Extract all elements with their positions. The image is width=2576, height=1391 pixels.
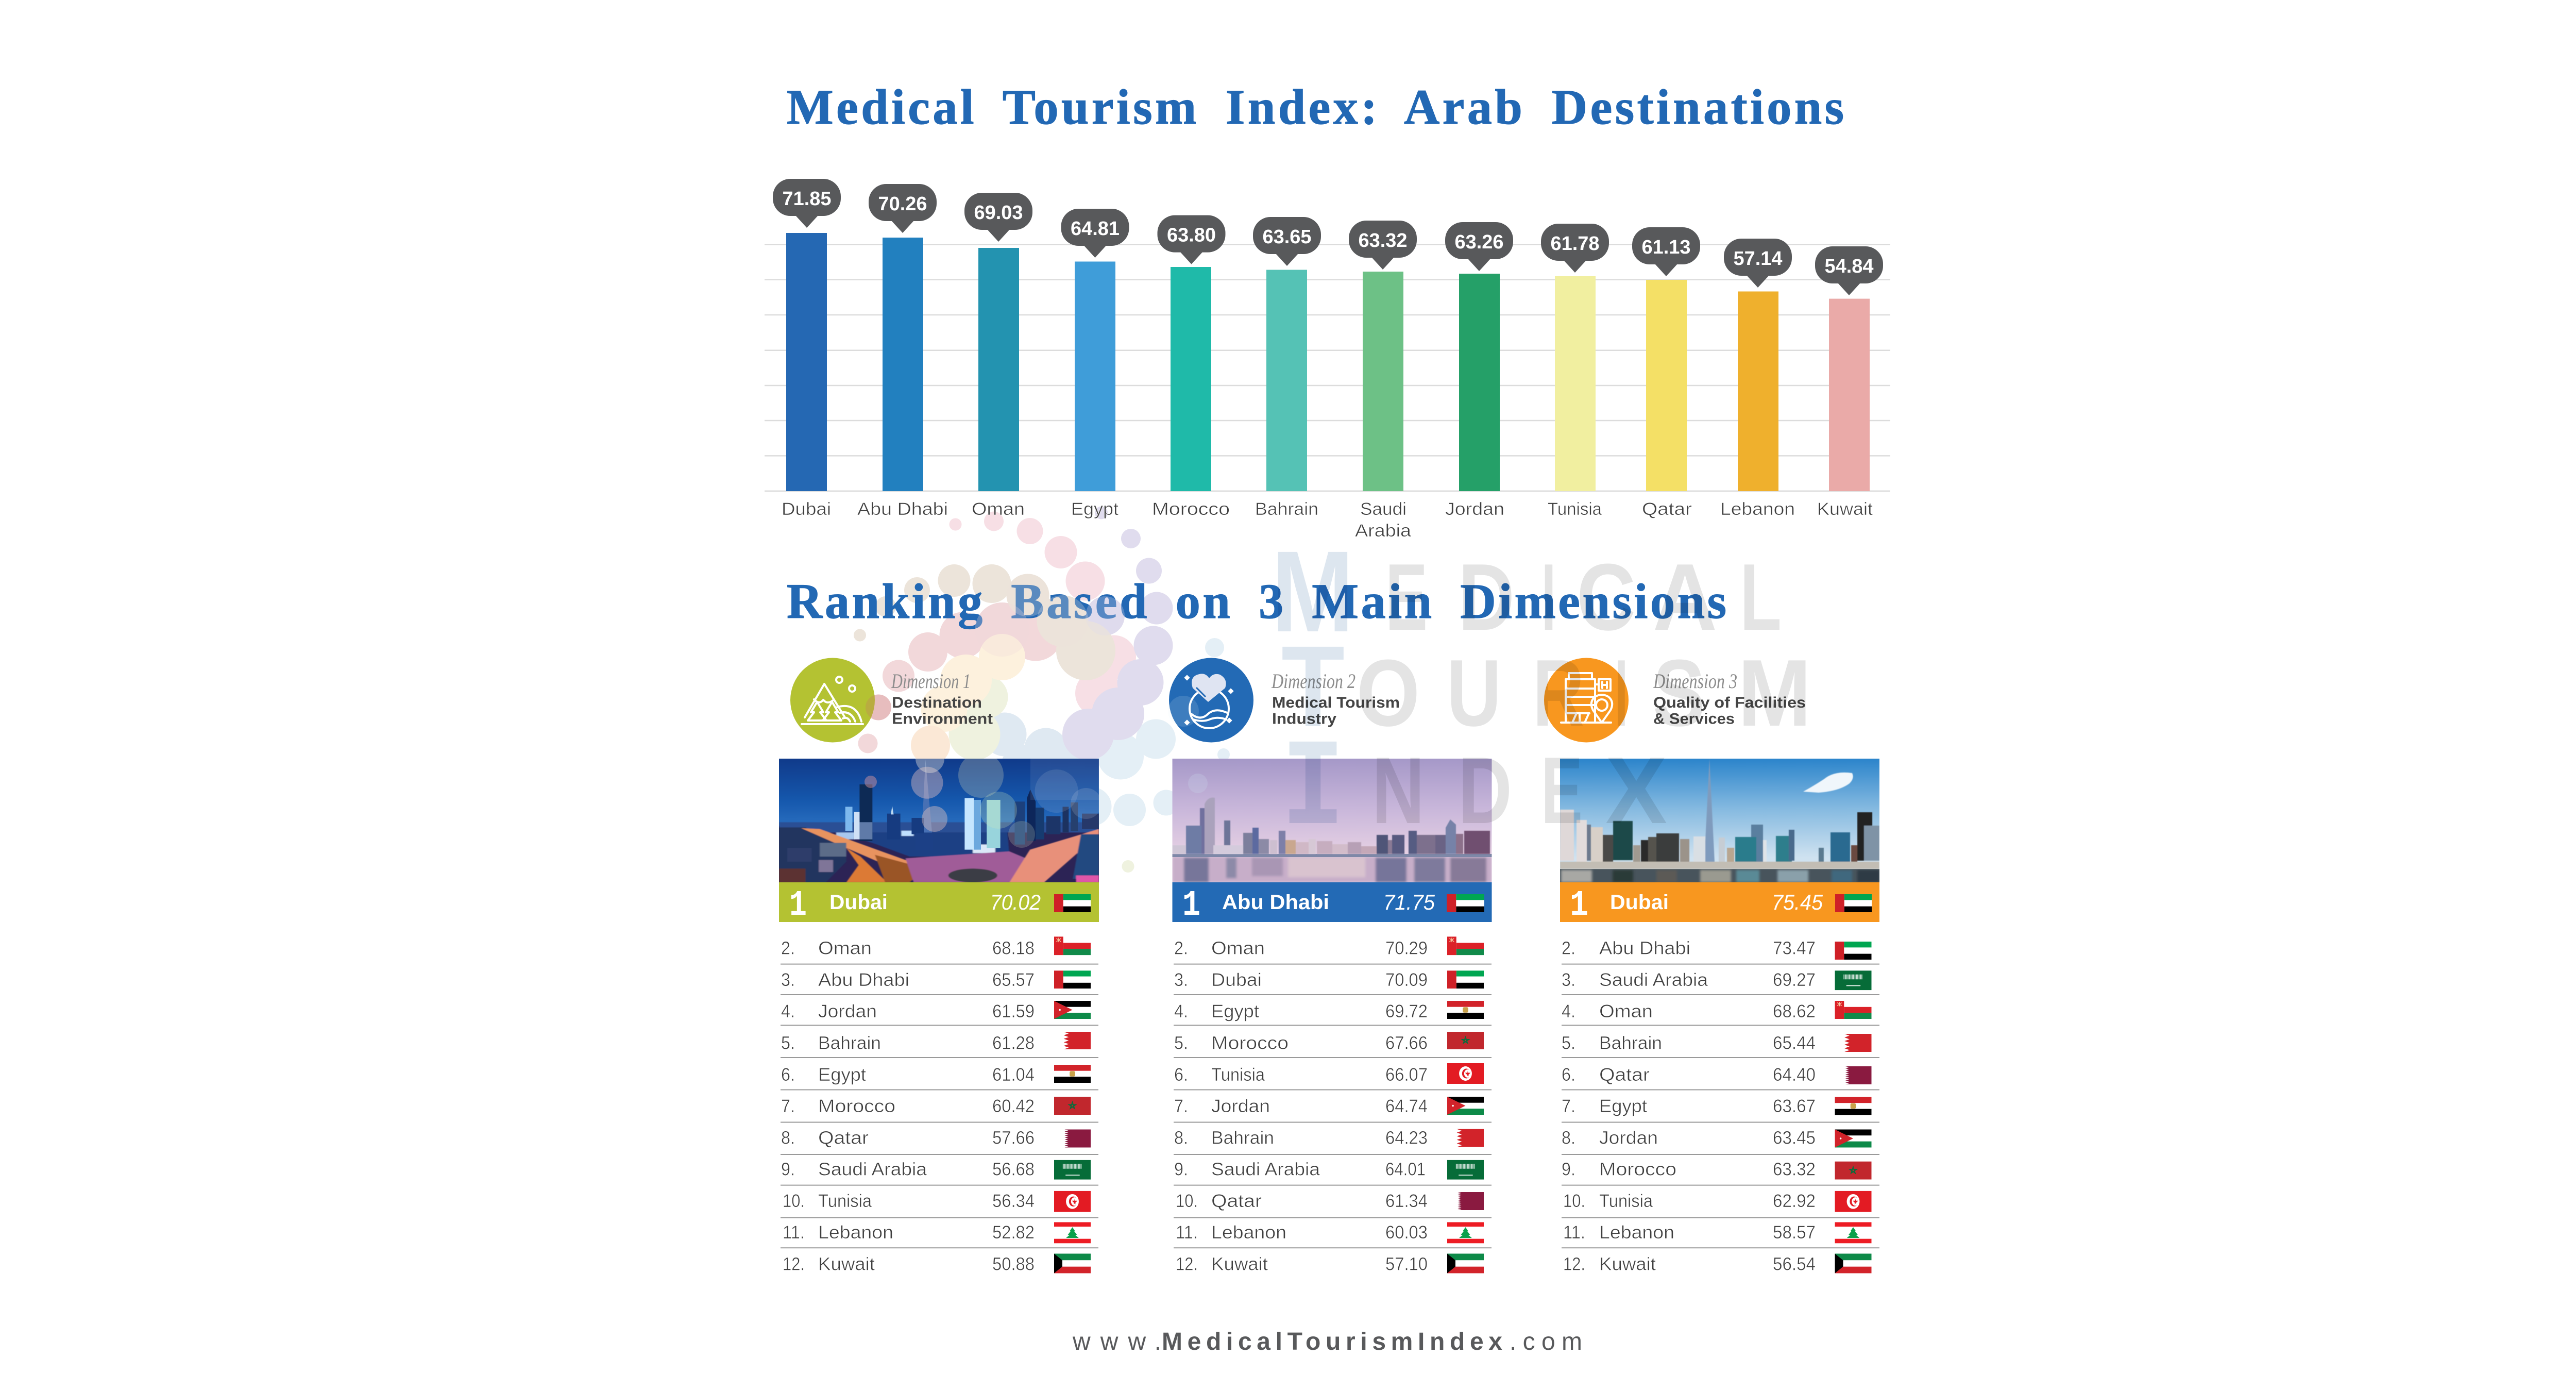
dimension 1 label: Destination — [892, 694, 982, 711]
category labels: Oman — [972, 499, 1025, 519]
row: Bahrain: 5. — [1562, 1033, 1575, 1053]
row: Oman: 2. — [1174, 938, 1188, 959]
category labels: Qatar — [1642, 499, 1692, 519]
row: Saudi Arabia: 3. — [1562, 970, 1575, 990]
watermark: MEDICAL TOURISM INDEX: M — [1738, 640, 1811, 746]
row: Morocco: 5. — [1174, 1033, 1188, 1053]
row: Kuwait: 12. — [1176, 1254, 1198, 1274]
dimension 3 label — [1653, 669, 1806, 728]
photo: Dubai daytime skyline — [1560, 759, 1879, 882]
row: Tunisia: 62.92 — [1773, 1191, 1816, 1211]
row: Bahrain: 8. — [1174, 1128, 1188, 1148]
watermark: MEDICAL TOURISM INDEX: U — [1447, 640, 1501, 746]
row: Lebanon: 11. — [783, 1222, 805, 1243]
watermark: MEDICAL TOURISM INDEX: R — [1533, 640, 1584, 746]
row: Jordan — [1562, 1128, 1871, 1148]
icon: heart over globe — [1168, 658, 1253, 742]
rank 1 band: Dubai 70.02: 70.02 — [990, 890, 1041, 914]
rank 1 band: Dubai 75.45: 75.45 — [1772, 890, 1823, 914]
row: Dubai — [1174, 970, 1484, 990]
row: Abu Dhabi: 2. — [1562, 938, 1575, 959]
row: Bahrain: Bahrain — [1211, 1128, 1274, 1148]
row: Qatar: Qatar — [1211, 1191, 1262, 1211]
row: Qatar: 64.40 — [1773, 1065, 1816, 1085]
row: Lebanon — [1563, 1222, 1871, 1243]
value callouts: 69.03 — [974, 202, 1023, 224]
row: Tunisia — [1174, 1063, 1484, 1085]
row: Lebanon: 60.03 — [1385, 1222, 1428, 1243]
row: Bahrain — [781, 1032, 1091, 1053]
watermark: MEDICAL TOURISM INDEX: T — [1281, 622, 1345, 751]
row: Tunisia: 10. — [783, 1191, 805, 1211]
row: Jordan — [781, 1001, 1091, 1021]
row: Jordan: Jordan — [1599, 1128, 1658, 1148]
row: Morocco: 9. — [1562, 1160, 1575, 1180]
row: Bahrain: 65.44 — [1773, 1033, 1816, 1053]
dimension 3 label: & Services — [1653, 710, 1735, 728]
row: Egypt: 7. — [1562, 1096, 1575, 1116]
bars — [786, 233, 1870, 491]
row: Oman: Oman — [1211, 938, 1265, 959]
watermark: MEDICAL TOURISM INDEX — [1272, 527, 1811, 861]
row: Qatar: 6. — [1562, 1065, 1575, 1085]
photo: Dubai at night — [779, 759, 1099, 882]
dimension 2 label: Medical Tourism — [1272, 694, 1400, 711]
row: Bahrain: Bahrain — [818, 1033, 881, 1053]
row: Abu Dhabi: Abu Dhabi — [818, 970, 909, 990]
row: Egypt — [1174, 1001, 1484, 1021]
row: Saudi Arabia: Saudi Arabia — [1211, 1160, 1320, 1180]
footer: website address: MedicalTourismIndex — [1162, 1328, 1502, 1355]
dimension 3 label: Dimension 3 — [1653, 669, 1737, 693]
row: Qatar: Qatar — [1599, 1065, 1650, 1085]
row: Jordan: 4. — [781, 1001, 795, 1021]
watermark: MEDICAL TOURISM INDEX: N — [1372, 737, 1425, 843]
category labels: Lebanon — [1720, 499, 1795, 519]
watermark: MEDICAL TOURISM INDEX: I — [1615, 640, 1628, 746]
row: Dubai: 3. — [1174, 970, 1188, 990]
row: Oman: 68.18 — [992, 938, 1035, 959]
row: Kuwait: 56.54 — [1773, 1254, 1816, 1274]
panel: dimension 1 header — [790, 658, 993, 742]
translucent bubbles over night photo — [865, 759, 1099, 848]
rank 1 band: Dubai 75.45: 1 — [1570, 885, 1588, 926]
row: Jordan: 7. — [1174, 1096, 1188, 1116]
row: Lebanon: 11. — [1563, 1222, 1585, 1243]
value callouts: 54.84 — [1825, 256, 1873, 277]
watermark: MEDICAL TOURISM INDEX: A — [1653, 544, 1717, 650]
row: Jordan: Jordan — [818, 1001, 877, 1021]
row: Abu Dhabi: 65.57 — [992, 970, 1035, 990]
row: Tunisia: 6. — [1174, 1065, 1188, 1085]
row: Qatar: 61.34 — [1385, 1191, 1428, 1211]
category labels: Morocco — [1152, 499, 1230, 519]
row: Oman: Oman — [818, 938, 872, 959]
value callouts: 61.13 — [1641, 237, 1691, 258]
category labels: Tunisia — [1548, 499, 1602, 519]
category labels — [782, 499, 1873, 541]
heading: Ranking Based on 3 Main Dimensions: Ranking Based on 3 Main Dimensions — [787, 574, 1726, 629]
row: Kuwait — [1176, 1253, 1484, 1274]
row: Egypt: 69.72 — [1385, 1001, 1428, 1021]
row: Saudi Arabia — [781, 1160, 1091, 1180]
category labels: Dubai — [782, 499, 831, 519]
row: Qatar — [781, 1128, 1091, 1148]
row: Qatar — [1562, 1065, 1871, 1085]
icon: mountain and trees — [790, 658, 891, 742]
icon: hospital building and pin — [1544, 658, 1629, 742]
rank 1 band: Dubai 70.02: 1 — [789, 885, 807, 926]
row: Morocco: Morocco — [1211, 1033, 1289, 1053]
list: dimension 3 rankings — [1562, 938, 1879, 1274]
watermark: MEDICAL TOURISM INDEX: E — [1541, 737, 1583, 843]
row: Tunisia: Tunisia — [1599, 1191, 1653, 1211]
footer: website address — [1072, 1328, 1582, 1355]
row: Saudi Arabia: 9. — [781, 1160, 795, 1180]
row: Tunisia: Tunisia — [1211, 1065, 1265, 1085]
row: Bahrain: Bahrain — [1599, 1033, 1662, 1053]
row: Abu Dhabi — [781, 970, 1091, 990]
row: Egypt: 6. — [781, 1065, 795, 1085]
row: Qatar: 8. — [781, 1128, 795, 1148]
row: Abu Dhabi: 73.47 — [1773, 938, 1816, 959]
row: Lebanon: Lebanon — [1599, 1222, 1674, 1243]
row: Kuwait: 12. — [1563, 1254, 1585, 1274]
footer: website address: www. — [1072, 1328, 1161, 1355]
watermark: MEDICAL TOURISM INDEX: E — [1385, 544, 1428, 650]
dimension 2 label: Dimension 2 — [1271, 669, 1355, 693]
row: Kuwait: 50.88 — [992, 1254, 1035, 1274]
row: Egypt: 61.04 — [992, 1065, 1035, 1085]
row: Jordan: Jordan — [1211, 1096, 1270, 1116]
photo: Abu Dhabi skyline — [1173, 759, 1492, 882]
row: Egypt: Egypt — [818, 1065, 866, 1085]
value callouts — [773, 179, 1883, 295]
row: Oman: Oman — [1599, 1001, 1653, 1021]
value callouts: 61.78 — [1551, 233, 1599, 255]
watermark: MEDICAL TOURISM INDEX: D — [1458, 737, 1512, 843]
row: Kuwait: Kuwait — [1599, 1254, 1656, 1274]
row: Saudi Arabia: 56.68 — [992, 1160, 1035, 1180]
row: Lebanon: Lebanon — [818, 1222, 893, 1243]
watermark: MEDICAL TOURISM INDEX: I — [1281, 720, 1345, 861]
row: Kuwait: Kuwait — [818, 1254, 875, 1274]
row: Qatar — [1176, 1191, 1484, 1211]
rank 1 band: Dubai 70.02 — [779, 882, 1099, 926]
bar chart: overall index by destination — [765, 179, 1890, 541]
row: Oman — [1562, 1001, 1871, 1021]
rank 1 band: Dubai 75.45 — [1560, 882, 1879, 926]
row: Egypt: Egypt — [1211, 1001, 1259, 1021]
value callouts: 63.80 — [1167, 225, 1216, 246]
row: Kuwait: Kuwait — [1211, 1254, 1268, 1274]
watermark: MEDICAL TOURISM INDEX: M — [1272, 527, 1354, 656]
row: Dubai: Dubai — [1211, 970, 1262, 990]
row: Bahrain: 64.23 — [1385, 1128, 1428, 1148]
row: Morocco: 7. — [781, 1096, 795, 1116]
row: Oman: 68.62 — [1773, 1001, 1816, 1021]
row: Kuwait — [1563, 1253, 1871, 1274]
row: Oman — [781, 936, 1091, 959]
rank 1 band: Abu Dhabi 71.75: Abu Dhabi — [1222, 891, 1329, 914]
row: Qatar: 10. — [1176, 1191, 1198, 1211]
rank 1 band: Abu Dhabi 71.75: 1 — [1182, 885, 1200, 926]
row: Oman — [1174, 936, 1484, 959]
row: Lebanon — [1176, 1222, 1484, 1243]
row: Morocco — [781, 1096, 1091, 1116]
watermark: MEDICAL TOURISM INDEX: O — [1357, 640, 1420, 746]
bubble tint over heading — [975, 574, 1125, 657]
row: Kuwait: 57.10 — [1385, 1254, 1428, 1274]
watermark: MEDICAL TOURISM INDEX: I — [1541, 544, 1556, 650]
dimension 1 label — [891, 669, 993, 728]
row: Bahrain: 61.28 — [992, 1033, 1035, 1053]
dimension 3 label: Quality of Facilities — [1653, 694, 1806, 711]
footer: website address: .com — [1510, 1328, 1582, 1355]
value callouts: 57.14 — [1733, 248, 1783, 270]
row: Tunisia — [783, 1191, 1091, 1212]
row: Tunisia: 66.07 — [1385, 1065, 1428, 1085]
category labels: Abu Dhabi — [857, 499, 948, 519]
row: Morocco: Morocco — [1599, 1160, 1676, 1180]
dimension 2 label — [1271, 669, 1400, 728]
row: Saudi Arabia — [1174, 1160, 1484, 1180]
category labels: Jordan — [1445, 499, 1504, 519]
row: Tunisia: Tunisia — [818, 1191, 872, 1211]
row: Saudi Arabia — [1562, 970, 1871, 990]
rank 1 band: Dubai 70.02: Dubai — [829, 891, 888, 914]
watermark: MEDICAL TOURISM INDEX: D — [1458, 544, 1515, 650]
watermark: MEDICAL TOURISM INDEX: X — [1605, 737, 1667, 843]
row: Lebanon: Lebanon — [1211, 1222, 1286, 1243]
row: Kuwait: 12. — [783, 1254, 805, 1274]
row: Qatar: 57.66 — [992, 1128, 1035, 1148]
category labels: Egypt — [1071, 499, 1119, 519]
title: Medical Tourism Index: Arab Destinations: Medical Tourism Index: Arab Destinations — [787, 79, 1844, 135]
row: Abu Dhabi — [1562, 938, 1871, 960]
watermark: MEDICAL TOURISM INDEX: C — [1577, 544, 1636, 650]
value callouts: 63.26 — [1455, 231, 1503, 253]
row: Egypt — [781, 1065, 1091, 1085]
panel: dimension 3 header — [1544, 658, 1806, 742]
category labels: Bahrain — [1255, 499, 1318, 519]
panel: dimension 2 header — [1168, 658, 1400, 742]
row: Egypt: 4. — [1174, 1001, 1188, 1021]
row: Morocco: 67.66 — [1385, 1033, 1428, 1053]
row: Saudi Arabia: 9. — [1174, 1160, 1188, 1180]
row: Dubai: 70.09 — [1385, 970, 1428, 990]
row: Jordan: 64.74 — [1385, 1096, 1428, 1116]
value callouts: 71.85 — [782, 188, 832, 210]
rank 1 band: Abu Dhabi 71.75 — [1173, 882, 1492, 926]
row: Morocco: Morocco — [818, 1096, 895, 1116]
row: Oman: 70.29 — [1385, 938, 1428, 959]
row: Oman: 2. — [781, 938, 795, 959]
value callouts: 63.65 — [1262, 226, 1312, 248]
row: Bahrain — [1174, 1128, 1484, 1148]
value callouts: 63.32 — [1358, 230, 1408, 252]
row: Morocco: 63.32 — [1773, 1160, 1816, 1180]
row: Morocco — [1562, 1160, 1871, 1180]
row: Qatar: Qatar — [818, 1128, 869, 1148]
row: Saudi Arabia: Saudi Arabia — [818, 1160, 927, 1180]
row: Abu Dhabi: Abu Dhabi — [1599, 938, 1690, 959]
category labels: Saudi — [1360, 499, 1406, 519]
watermark: MEDICAL TOURISM INDEX: L — [1740, 544, 1782, 650]
dimension 1 label: Environment — [892, 710, 993, 728]
rank 1 band: Dubai 75.45: Dubai — [1610, 891, 1669, 914]
dimension 2 label: Industry — [1272, 710, 1336, 728]
row: Kuwait — [783, 1253, 1091, 1274]
decorative bubble cluster — [854, 506, 1230, 873]
row: Abu Dhabi: 3. — [781, 970, 795, 990]
value callouts: 70.26 — [878, 193, 927, 215]
category labels: Kuwait — [1817, 499, 1873, 519]
row: Egypt: 63.67 — [1773, 1096, 1816, 1116]
row: Morocco — [1174, 1032, 1484, 1053]
category labels: Arabia — [1355, 521, 1411, 541]
row: Jordan: 63.45 — [1773, 1128, 1816, 1148]
row: Jordan: 61.59 — [992, 1001, 1035, 1021]
row: Saudi Arabia: Saudi Arabia — [1599, 970, 1708, 990]
value callouts: 64.81 — [1071, 218, 1120, 240]
row: Saudi Arabia: 69.27 — [1773, 970, 1816, 990]
row: Bahrain — [1562, 1033, 1871, 1053]
list: dimension 1 rankings — [781, 936, 1098, 1274]
row: Tunisia — [1563, 1191, 1871, 1212]
row: Egypt: Egypt — [1599, 1096, 1647, 1116]
row: Lebanon: 58.57 — [1773, 1222, 1816, 1243]
row: Tunisia: 56.34 — [992, 1191, 1035, 1211]
watermark: MEDICAL TOURISM INDEX: S — [1653, 640, 1705, 746]
row: Oman: 4. — [1562, 1001, 1575, 1021]
list: dimension 2 rankings — [1174, 936, 1492, 1274]
row: Lebanon: 52.82 — [992, 1222, 1035, 1243]
row: Egypt — [1562, 1096, 1871, 1116]
dimension 1 label: Dimension 1 — [891, 669, 971, 693]
row: Morocco: 60.42 — [992, 1096, 1035, 1116]
row: Lebanon: 11. — [1176, 1222, 1198, 1243]
row: Jordan: 8. — [1562, 1128, 1575, 1148]
row: Tunisia: 10. — [1563, 1191, 1585, 1211]
row: Bahrain: 5. — [781, 1033, 795, 1053]
rank 1 band: Abu Dhabi 71.75: 71.75 — [1383, 890, 1435, 914]
row: Saudi Arabia: 64.01 — [1385, 1160, 1426, 1180]
row: Lebanon — [783, 1222, 1091, 1243]
row: Jordan — [1174, 1096, 1484, 1116]
